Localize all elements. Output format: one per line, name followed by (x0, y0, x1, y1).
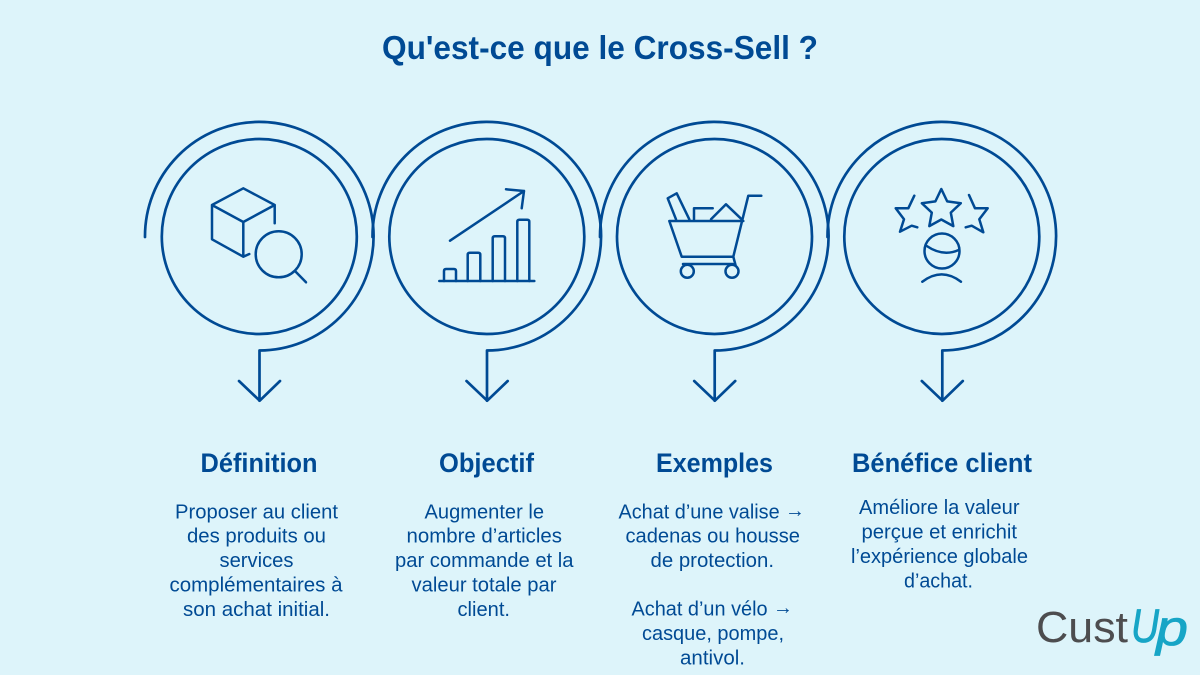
text: bénéfice client: Améliore la valeur (859, 496, 1020, 519)
logo: CustUp (1036, 599, 1188, 656)
heading: exemples: Exemples (656, 448, 773, 478)
text: définition: son achat initial. (183, 598, 330, 621)
ring with arrow: définition (145, 122, 374, 401)
text: objectif: client. (458, 598, 510, 621)
text: objectif: Augmenter le (424, 500, 544, 523)
text: exemples: cadenas ou housse (626, 525, 800, 548)
icon: growth chart (439, 189, 534, 281)
text: exemples: casque, pompe, (642, 622, 784, 645)
panel: objectif (372, 122, 601, 621)
text: objectif (395, 500, 574, 621)
icon: shopping cart (668, 193, 761, 278)
logo: CustUp: U (1131, 599, 1160, 652)
text: bénéfice client: perçue et enrichit (862, 520, 1017, 544)
logo: CustUp: p (1154, 600, 1188, 656)
text: objectif: nombre d’articles (406, 525, 562, 548)
heading: bénéfice client: Bénéfice client (852, 448, 1032, 478)
text: définition (170, 500, 343, 621)
title: Qu'est-ce que le Cross-Sell ? (382, 29, 818, 66)
heading: définition: Définition (200, 448, 318, 478)
text: définition: Proposer au client (175, 500, 338, 523)
text: objectif: par commande et la (395, 549, 574, 572)
panel: exemples (600, 122, 829, 670)
text: bénéfice client: d’achat. (904, 569, 973, 592)
ring with arrow: bénéfice client (827, 122, 1056, 401)
text: définition: services (220, 549, 294, 572)
icon: client with stars (896, 189, 988, 282)
heading: objectif: Objectif (439, 448, 535, 478)
text: bénéfice client (851, 496, 1028, 592)
text: bénéfice client: l’expérience globale (851, 545, 1028, 568)
text: exemples: de protection. (650, 549, 774, 572)
text: exemples: Achat d’un vélo (632, 598, 772, 621)
text: exemples: Achat d’une valise (618, 500, 785, 523)
panel: bénéfice client (827, 122, 1056, 592)
text: définition: complémentaires à (170, 574, 343, 596)
text: définition: des produits ou (187, 525, 326, 548)
text: exemples: → (773, 596, 793, 619)
logo: CustUp: Cust (1036, 603, 1128, 652)
panel: définition (145, 122, 374, 621)
text: objectif: valeur totale par (412, 574, 557, 596)
ring with arrow: exemples (600, 122, 829, 401)
icon: box and magnifier (212, 188, 306, 282)
text: exemples (618, 499, 805, 670)
text: exemples: → (785, 499, 805, 522)
ring with arrow: objectif (372, 122, 601, 401)
text: exemples: antivol. (680, 646, 745, 670)
